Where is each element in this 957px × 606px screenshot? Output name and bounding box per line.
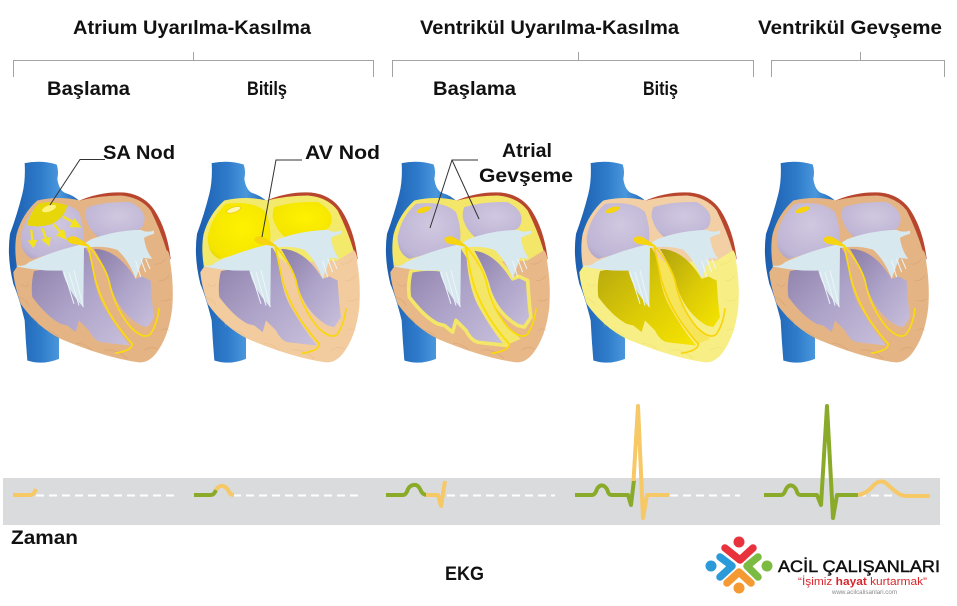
- subheading: Bitiş (ventricle): Bitiş: [643, 79, 678, 100]
- heading: Ventrikül Gevşeme: Ventrikül Gevşeme: [758, 18, 942, 39]
- label: SA Nod: SA Nod: [103, 143, 175, 164]
- heading: Atrium Uyarılma-Kasılma: Atrium Uyarılma-Kasılma: [73, 18, 311, 39]
- heart 4: ventricles contracted: [575, 162, 739, 363]
- bracket: ventricle contraction: [392, 52, 754, 77]
- ECG trace 5: [764, 406, 930, 518]
- bracket: atrium: [14, 52, 374, 77]
- SA node excitation patch: [27, 202, 67, 226]
- label: Atrial Gevşeme: Gevşeme: [479, 166, 573, 187]
- leader: Atrial Gevşeme: [430, 160, 479, 228]
- SA node: [41, 203, 57, 214]
- SA node: [795, 205, 810, 215]
- subheading: Başlama (ventricle): Başlama: [433, 79, 516, 100]
- logo: Acil Çalışanları: [706, 536, 940, 596]
- time axis dashes: [36, 494, 893, 496]
- logo url: www.acilcalisanlari.com: [831, 590, 897, 596]
- label: EKG: EKG: [445, 564, 484, 585]
- bracket: ventricle relaxation: [772, 52, 944, 77]
- leader: AV Nod: [262, 160, 302, 237]
- label: Zaman: Zaman: [11, 528, 78, 549]
- subheading: Bitilş (atrium): Bitilş: [247, 79, 287, 100]
- heart 5: ventricular relaxation: [765, 162, 929, 363]
- ECG band: [3, 478, 940, 525]
- heart 2: atria contracted: [196, 162, 360, 363]
- logo mark: [706, 536, 772, 594]
- arrows: impulse spread: [29, 216, 80, 247]
- ECG trace 2: [194, 486, 234, 495]
- label: AV Nod: AV Nod: [305, 143, 380, 164]
- SA node: [226, 205, 241, 215]
- logo name: ACİL ÇALIŞANLARI: [778, 557, 940, 576]
- leader: SA Nod: [50, 160, 105, 205]
- heart 3: ventricular excitation start: [386, 162, 550, 363]
- SA node: [416, 205, 431, 215]
- ECG trace 4: [575, 406, 669, 518]
- subheading: Başlama (atrium): Başlama: [47, 79, 130, 100]
- heading: Ventrikül Uyarılma-Kasılma: Ventrikül Uyarılma-Kasılma: [420, 18, 679, 39]
- label: Atrial Gevşeme: Atrial: [502, 141, 552, 162]
- ECG trace 1: [13, 489, 36, 495]
- ECG trace 3: [386, 481, 445, 506]
- heart 1: SA node firing: [9, 162, 173, 363]
- SA node: [605, 205, 620, 215]
- logo slogan: “İşimiz hayat kurtarmak”: [798, 575, 927, 588]
